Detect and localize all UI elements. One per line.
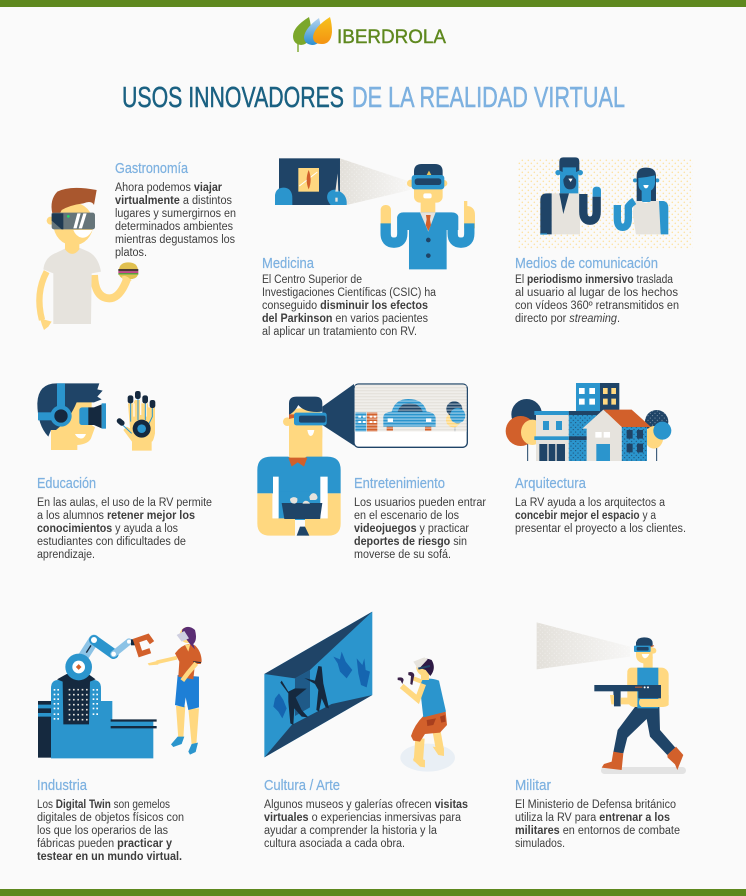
text block: Investigaciones Científicas (CSIC) ha bbox=[262, 287, 437, 299]
top bar bbox=[0, 0, 746, 7]
illustration: surgeon with VR headset bbox=[275, 158, 475, 269]
text block: digitales de objetos físicos con bbox=[37, 812, 184, 824]
text block: virtualmente a distintos bbox=[115, 195, 232, 207]
title bbox=[122, 82, 625, 114]
text block: simulados. bbox=[515, 838, 565, 850]
text block bbox=[115, 182, 236, 259]
panel: Cultura / Arte bbox=[264, 612, 468, 850]
text block bbox=[515, 274, 679, 325]
bottom bar bbox=[0, 889, 746, 896]
text block: lugares y sumergirnos en bbox=[115, 208, 236, 220]
text block: deportes de riesgo sin bbox=[354, 536, 467, 548]
heading: Industria bbox=[37, 778, 88, 794]
text block: los que los operarios de las bbox=[37, 825, 168, 837]
panel: Medicina bbox=[262, 158, 475, 338]
text block: testear en un mundo virtual. bbox=[37, 851, 182, 863]
text block: virtuales o experiencias inmersivas para bbox=[264, 812, 462, 824]
illustration: immersive gallery and visitor bbox=[264, 612, 455, 772]
illustration: two journalists on a dotted background bbox=[517, 157, 693, 249]
panel: Educación bbox=[37, 383, 212, 561]
text block: ayudar a comprender la historia y la bbox=[264, 825, 438, 837]
text block: videojuegos y practicar bbox=[354, 523, 469, 535]
text block: presentar el proyecto a los clientes. bbox=[515, 523, 686, 535]
text block: directo por streaming. bbox=[515, 313, 620, 325]
text block: Ahora podemos viajar bbox=[115, 182, 222, 194]
title: DE LA REALIDAD VIRTUAL bbox=[352, 82, 625, 114]
text block bbox=[515, 799, 680, 850]
heading: Militar bbox=[515, 778, 551, 794]
illustration: robot arm and woman with VR headset bbox=[38, 627, 202, 758]
text block: estudiantes con dificultades de bbox=[37, 536, 186, 548]
illustration: buildings and trees bbox=[506, 383, 671, 461]
text block: del Parkinson en varios pacientes bbox=[262, 313, 428, 325]
text block: concebir mejor el espacio y a bbox=[515, 510, 657, 522]
text block: determinados ambientes bbox=[115, 221, 233, 233]
heading: Medicina bbox=[262, 256, 315, 272]
heading: Medios de comunicación bbox=[515, 256, 658, 272]
text block bbox=[264, 799, 468, 850]
text block: aprendizaje. bbox=[37, 549, 95, 561]
text block: en el escenario de los bbox=[354, 510, 459, 522]
heading: Arquitectura bbox=[515, 476, 587, 492]
text block: Los Digital Twin son gemelos bbox=[37, 799, 170, 811]
illustration: man with VR headset and burger bbox=[39, 188, 138, 330]
text block: cultura asociada a cada obra. bbox=[264, 838, 405, 850]
text block: El Centro Superior de bbox=[262, 274, 362, 286]
text block: al usuario al lugar de los hechos bbox=[515, 287, 678, 299]
panel: Entretenimiento bbox=[257, 384, 486, 561]
heading: Cultura / Arte bbox=[264, 778, 340, 794]
text block: mientras degustamos los bbox=[115, 234, 235, 246]
title: USOS INNOVADORES bbox=[122, 82, 344, 114]
text block: Algunos museos y galerías ofrecen visitas bbox=[264, 799, 468, 811]
panel: Medios de comunicación bbox=[515, 157, 693, 325]
text block: a los alumnos retener mejor los bbox=[37, 510, 195, 522]
text block bbox=[37, 799, 184, 863]
heading: Entretenimiento bbox=[354, 476, 445, 492]
text block: militares en entornos de combate bbox=[515, 825, 680, 837]
panel: Militar bbox=[515, 622, 686, 850]
text block: con vídeos 360º retransmitidos en bbox=[515, 300, 679, 312]
text block: moverse de su sofá. bbox=[354, 549, 451, 561]
logo: Iberdrola: IBERDROLA bbox=[337, 26, 446, 48]
text block: conocimientos y ayuda a los bbox=[37, 523, 178, 535]
illustration: soldier with VR headset and gun bbox=[537, 622, 686, 774]
text block: platos. bbox=[115, 247, 147, 259]
text block: utiliza la RV para entrenar a los bbox=[515, 812, 670, 824]
text block: El Ministerio de Defensa británico bbox=[515, 799, 676, 811]
illustration: man on sofa with popcorn and VR screen bbox=[257, 384, 467, 536]
text block bbox=[37, 497, 212, 561]
panel: Industria bbox=[37, 627, 202, 863]
text block: En las aulas, el uso de la RV permite bbox=[37, 497, 212, 509]
text block: al aplicar un tratamiento con RV. bbox=[262, 326, 417, 338]
text block: Los usuarios pueden entrar bbox=[354, 497, 486, 509]
heading: Gastronomía bbox=[115, 161, 189, 177]
panel: Gastronomía bbox=[39, 161, 236, 330]
text block bbox=[515, 497, 686, 535]
text block: conseguido disminuir los efectos bbox=[262, 300, 428, 312]
panel: Arquitectura bbox=[506, 383, 686, 535]
text block: El periodismo inmersivo traslada bbox=[515, 274, 674, 286]
illustration: student head with headset and sensor glove bbox=[37, 383, 155, 451]
heading: Educación bbox=[37, 476, 96, 492]
text block: fábricas pueden practicar y bbox=[37, 838, 173, 850]
text block: La RV ayuda a los arquitectos a bbox=[515, 497, 666, 509]
logo: Iberdrola bbox=[293, 17, 446, 52]
text block bbox=[354, 497, 486, 561]
text block bbox=[262, 274, 437, 338]
